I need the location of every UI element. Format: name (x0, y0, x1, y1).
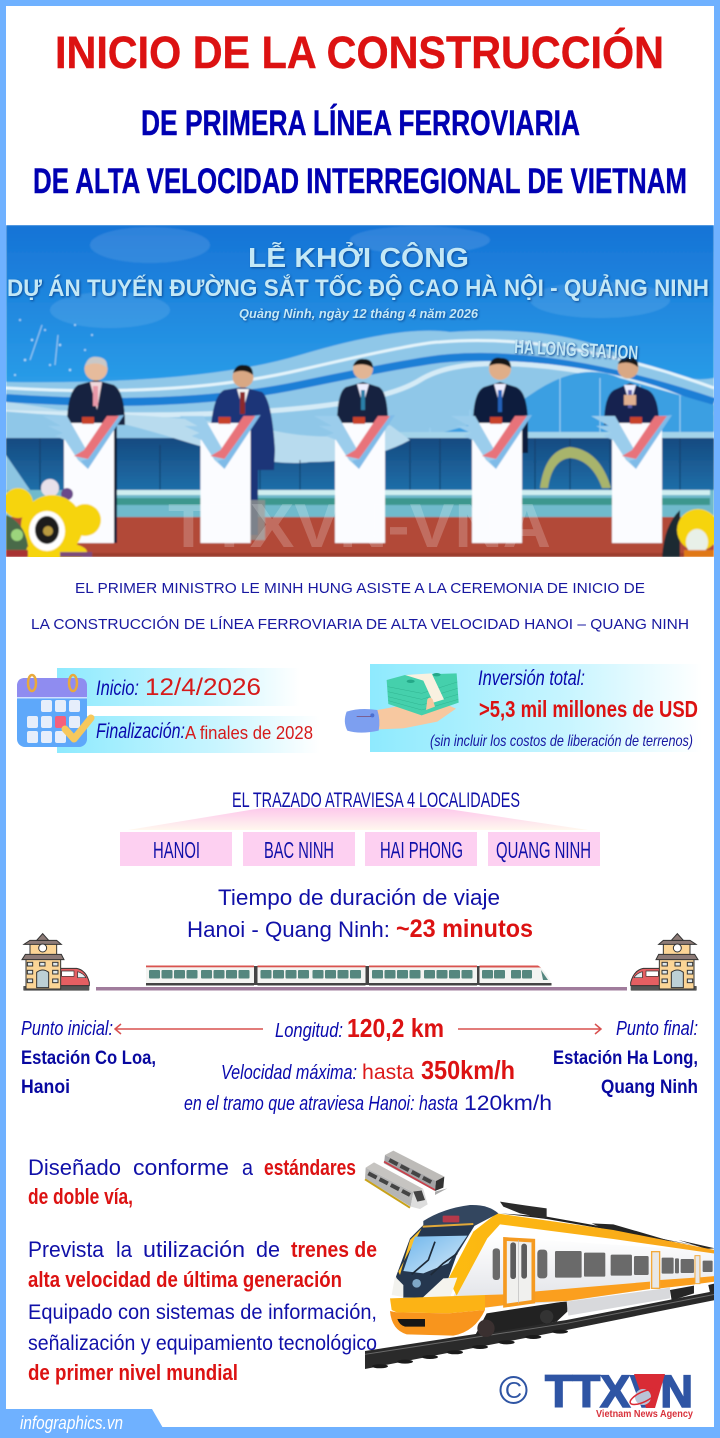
route labels: Velocidad máxima: (221, 1062, 357, 1084)
text block: design and equipment: la (116, 1237, 133, 1262)
footer tab: infographics.vn (20, 1413, 123, 1433)
photo banner text (7, 241, 709, 364)
route labels: hasta (362, 1061, 414, 1084)
logo: TTXVN: TTXVN (545, 1366, 693, 1417)
panel: four localities: HANOI (153, 837, 200, 863)
watermark: TTXVN-VNA (168, 492, 551, 561)
title: INICIO DE LA CONSTRUCCIÓN (55, 27, 664, 78)
travel time: ~23 minutos (396, 915, 533, 943)
icon: double track trains (365, 1151, 447, 1209)
photo banner text: HA LONG STATION (514, 337, 639, 364)
travel time: Hanoi - Quang Ninh: (187, 917, 390, 942)
text block: design and equipment: trenes de (291, 1237, 377, 1262)
route diagram (22, 934, 698, 991)
logo: TTXVN: C (505, 1377, 522, 1403)
caption: LA CONSTRUCCIÓN DE LÍNEA FERROVIARIA DE ALTA VELOCIDAD HANOI – QUANG NINH (31, 616, 689, 633)
text block: design and equipment: de doble vía, (28, 1184, 133, 1209)
route labels (21, 1013, 698, 1115)
text block: design and equipment: utilización (143, 1237, 245, 1262)
route labels: 350km/h (421, 1055, 515, 1085)
route labels: Quang Ninh (601, 1077, 698, 1098)
text block: design and equipment: Prevista (28, 1237, 105, 1262)
travel time (187, 885, 533, 943)
panel: dates: A finales de 2028 (185, 723, 313, 743)
text block: design and equipment: de primer nivel mundial (28, 1360, 238, 1385)
panel: four localities: BAC NINH (264, 837, 334, 863)
route labels: Longitud: (275, 1020, 343, 1042)
people (67, 357, 659, 543)
route labels: Estación Co Loa, (21, 1048, 156, 1069)
orange belt (485, 1276, 720, 1308)
text block: design and equipment (28, 1155, 377, 1385)
roof and stripe (500, 1213, 720, 1250)
text block: design and equipment: Equipado con sistemas de información, (28, 1301, 377, 1324)
icon: calendar (17, 675, 91, 747)
lion dance left (3, 479, 101, 562)
caption (31, 581, 689, 633)
route labels: Punto final: (616, 1018, 698, 1040)
route labels: Estación Ha Long, (553, 1048, 698, 1069)
photo: groundbreaking ceremony (3, 225, 719, 562)
text block: design and equipment: a (242, 1155, 254, 1180)
panel: investment: Inversión total: (478, 667, 585, 690)
panel: dates: 12/4/2026 (145, 674, 261, 701)
panel: dates (17, 668, 320, 753)
panel: four localities: QUANG NINH (496, 837, 591, 863)
route labels: Punto inicial: (21, 1018, 113, 1040)
lion dance right (662, 509, 719, 557)
body (454, 1255, 714, 1308)
windows (493, 1248, 720, 1280)
undercarriage (475, 1301, 567, 1336)
arrow: to end (458, 1024, 601, 1034)
illustration: trains (365, 1151, 720, 1369)
travel time: Tiempo de duración de viaje (218, 885, 500, 910)
heading: localities: EL TRAZADO ATRAVIESA 4 LOCALIDADES (232, 789, 520, 812)
text block: design and equipment: Diseñado (28, 1155, 121, 1180)
icon: end station (631, 934, 698, 991)
title: DE PRIMERA LÍNEA FERROVIARIA (141, 103, 580, 143)
panel: four localities: HAI PHONG (380, 837, 463, 863)
route labels: Hanoi (21, 1077, 70, 1098)
footer tab (0, 1409, 163, 1433)
icon: start station (22, 934, 89, 991)
route labels: 120km/h (464, 1092, 552, 1115)
panel: dates: Inicio: (96, 677, 139, 700)
text block: design and equipment: señalización y equipamiento tecnológico (28, 1332, 377, 1355)
route labels: en el tramo que atraviesa Hanoi: hasta (184, 1093, 458, 1115)
route labels: 120,2 km (347, 1013, 444, 1043)
nose (423, 1205, 498, 1226)
panel: four localities (120, 808, 600, 866)
photo banner text: Quảng Ninh, ngày 12 tháng 4 năm 2026 (239, 306, 479, 321)
text block: design and equipment: conforme (133, 1155, 229, 1180)
text block: design and equipment: de (256, 1237, 280, 1262)
arrow: to start (115, 1024, 263, 1034)
icon: train on track (146, 966, 552, 986)
track (365, 1290, 720, 1369)
panel: investment (345, 664, 702, 752)
caption: EL PRIMER MINISTRO LE MINH HUNG ASISTE A LA CEREMONIA DE INICIO DE (75, 581, 645, 597)
photo banner text: LỄ KHỞI CÔNG (248, 241, 469, 273)
text block: design and equipment: alta velocidad de última generación (28, 1267, 342, 1292)
logo: TTXVN: Vietnam News Agency (596, 1408, 693, 1420)
text block: design and equipment: estándares (264, 1155, 356, 1180)
title (33, 27, 687, 201)
lecterns (43, 415, 672, 543)
panel: dates: Finalización: (96, 720, 185, 743)
icon: hand with money (345, 673, 459, 733)
doors (505, 1239, 533, 1306)
